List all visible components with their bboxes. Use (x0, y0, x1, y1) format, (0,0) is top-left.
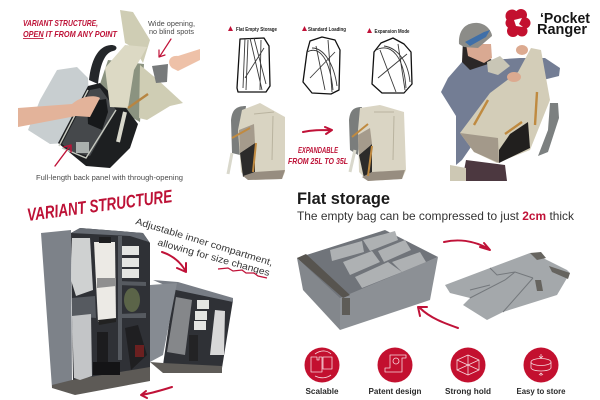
white telephoto lens (94, 242, 116, 322)
icon: strong hold (450, 348, 486, 382)
cap (459, 23, 492, 48)
hair (462, 40, 494, 70)
trousers (462, 160, 507, 181)
insert base strip (150, 362, 222, 373)
clip strap (342, 298, 350, 315)
panel: open backpack scene (18, 10, 200, 182)
jacket (441, 58, 560, 165)
camera (87, 99, 108, 130)
fold lines (470, 268, 533, 312)
arrow: expansion (303, 127, 332, 134)
collar (487, 56, 510, 75)
hand on bag (507, 72, 521, 82)
feature: easy to store (516, 348, 566, 396)
box inner floor (297, 230, 438, 300)
text: variant structure note (23, 18, 118, 39)
label: Standard Loading (308, 27, 346, 33)
left hand (18, 96, 100, 127)
face (466, 44, 492, 63)
stacked lens tubes (194, 300, 209, 330)
illustration: assembled insert box (297, 230, 438, 330)
insert interior (163, 283, 233, 368)
icon: red warning triangle (302, 26, 307, 31)
illustration: large camera insert (41, 228, 150, 395)
label: Patent design (368, 387, 422, 396)
text: expandable (288, 145, 348, 166)
icon: red flower (506, 9, 530, 37)
illustration: small camera insert (150, 280, 233, 373)
icon: easy to store (524, 348, 558, 382)
mug (152, 64, 168, 83)
cream top lid (120, 10, 150, 63)
icon row (304, 348, 566, 396)
cream side flap (139, 65, 183, 120)
text: wide opening caption: no blind spots (149, 29, 195, 36)
decorative scribble under note (218, 268, 267, 278)
heading: flat storage: Flat storage (297, 190, 390, 208)
arrow: flat to box (418, 307, 458, 328)
label: Easy to store (516, 387, 566, 396)
backpack lower dark panel (499, 122, 530, 163)
cream front panel (105, 45, 147, 108)
panel: woman holding backpack (441, 23, 560, 181)
dark lens (189, 335, 198, 361)
insert left wall (150, 283, 177, 362)
text: adjustable inner compartment: allowing for size changes (156, 237, 271, 279)
panel: expansion comparison (228, 103, 406, 181)
open mesh pocket flap (28, 67, 89, 144)
icon: scalable (304, 348, 340, 382)
back strap right (538, 103, 559, 156)
arrow: from note into compartment (162, 252, 186, 272)
folded panel (445, 253, 570, 320)
camera body top (71, 238, 93, 296)
glass lens (124, 288, 140, 312)
feature: strong hold (445, 348, 491, 396)
text: variant structure note: VARIANT STRUCTURE, (23, 18, 98, 28)
wordmark: Ranger (537, 22, 587, 38)
camera at bottom (93, 362, 120, 375)
frame zip edge (59, 90, 116, 158)
arrow: back to large insert (141, 387, 172, 398)
feature: scalable (304, 348, 340, 396)
white camera (210, 310, 225, 355)
insert top rim (71, 228, 149, 242)
lens dark band (97, 278, 116, 288)
icon: expanded bag outline (372, 38, 412, 93)
dark bag body (58, 83, 138, 168)
hand on zip (516, 45, 528, 55)
orange strap (128, 94, 148, 108)
logo: Pocket Ranger (506, 9, 590, 38)
text: variant structure note: OPEN IT FROM ANY POINT (23, 29, 118, 39)
icon: red warning triangle (367, 28, 372, 33)
cream dangling strap (118, 112, 125, 142)
label: Flat Empty Storage (236, 27, 277, 33)
flash display (135, 345, 144, 357)
wordmark: ‘Pocket (540, 11, 590, 27)
strap tabs (530, 252, 570, 291)
text: wide opening caption: Wide opening, (148, 21, 195, 28)
dark lens bottom (97, 332, 108, 368)
insert top rim (153, 280, 233, 302)
flash unit (125, 325, 147, 370)
arrow: to back panel (55, 145, 71, 166)
heading: variant structure: VARIANT STRUCTURE (26, 186, 174, 225)
stacked white lens tubes (122, 246, 139, 278)
mode: flat empty storage (228, 26, 277, 92)
icon: standard bag outline (303, 37, 340, 94)
text: adjustable inner compartment (134, 216, 274, 279)
shoulder strap (89, 45, 117, 84)
panel: three loading modes (228, 26, 412, 94)
text: expandable: EXPANDABLE (298, 145, 338, 155)
bag before expansion (228, 103, 285, 180)
lens dark band top (99, 237, 111, 243)
text: back panel caption: Full-length back panel with through-opening (36, 175, 183, 182)
cream leg strap (450, 165, 466, 181)
dividers (72, 236, 146, 360)
icon: flat bag outline (237, 38, 270, 92)
label: Scalable (306, 387, 339, 396)
box right wall (340, 257, 438, 330)
arrow: to wide opening (159, 39, 171, 57)
gear in compartment (76, 142, 89, 153)
backpack held (460, 48, 550, 163)
insert base strip (52, 367, 150, 395)
label: Expansion Mode (374, 29, 410, 35)
olive inner lining (100, 60, 144, 122)
mode: expansion (367, 28, 412, 93)
camera compartment interior (62, 88, 116, 156)
right arm and hand (169, 49, 200, 71)
label: Strong hold (445, 387, 491, 396)
text: expandable: FROM 25L TO 35L (288, 156, 348, 166)
insert back and interior (71, 228, 150, 382)
arrow: box to flat (444, 240, 490, 250)
icon: patent (378, 348, 412, 382)
mode: standard loading (302, 26, 346, 94)
dividers (330, 231, 426, 288)
sunglasses (465, 30, 490, 46)
box left wall (297, 258, 340, 330)
brand strap (297, 254, 350, 298)
text: adjustable inner compartment: Adjustable inner compartment, (134, 216, 274, 269)
feature: patent design (368, 348, 422, 396)
icon: red warning triangle (228, 26, 233, 31)
grey camera body (167, 297, 192, 355)
lens base (98, 318, 116, 325)
illustration: folded flat insert (445, 252, 570, 320)
bag after expansion (349, 105, 406, 181)
backpack base (460, 133, 499, 163)
grey mirrorless body (72, 314, 92, 380)
orange straps (474, 92, 537, 134)
wordmark (537, 11, 590, 38)
insert left wall (41, 230, 72, 388)
text: flat storage subtitle: The empty bag can be compressed to just 2cm thick (297, 209, 575, 223)
